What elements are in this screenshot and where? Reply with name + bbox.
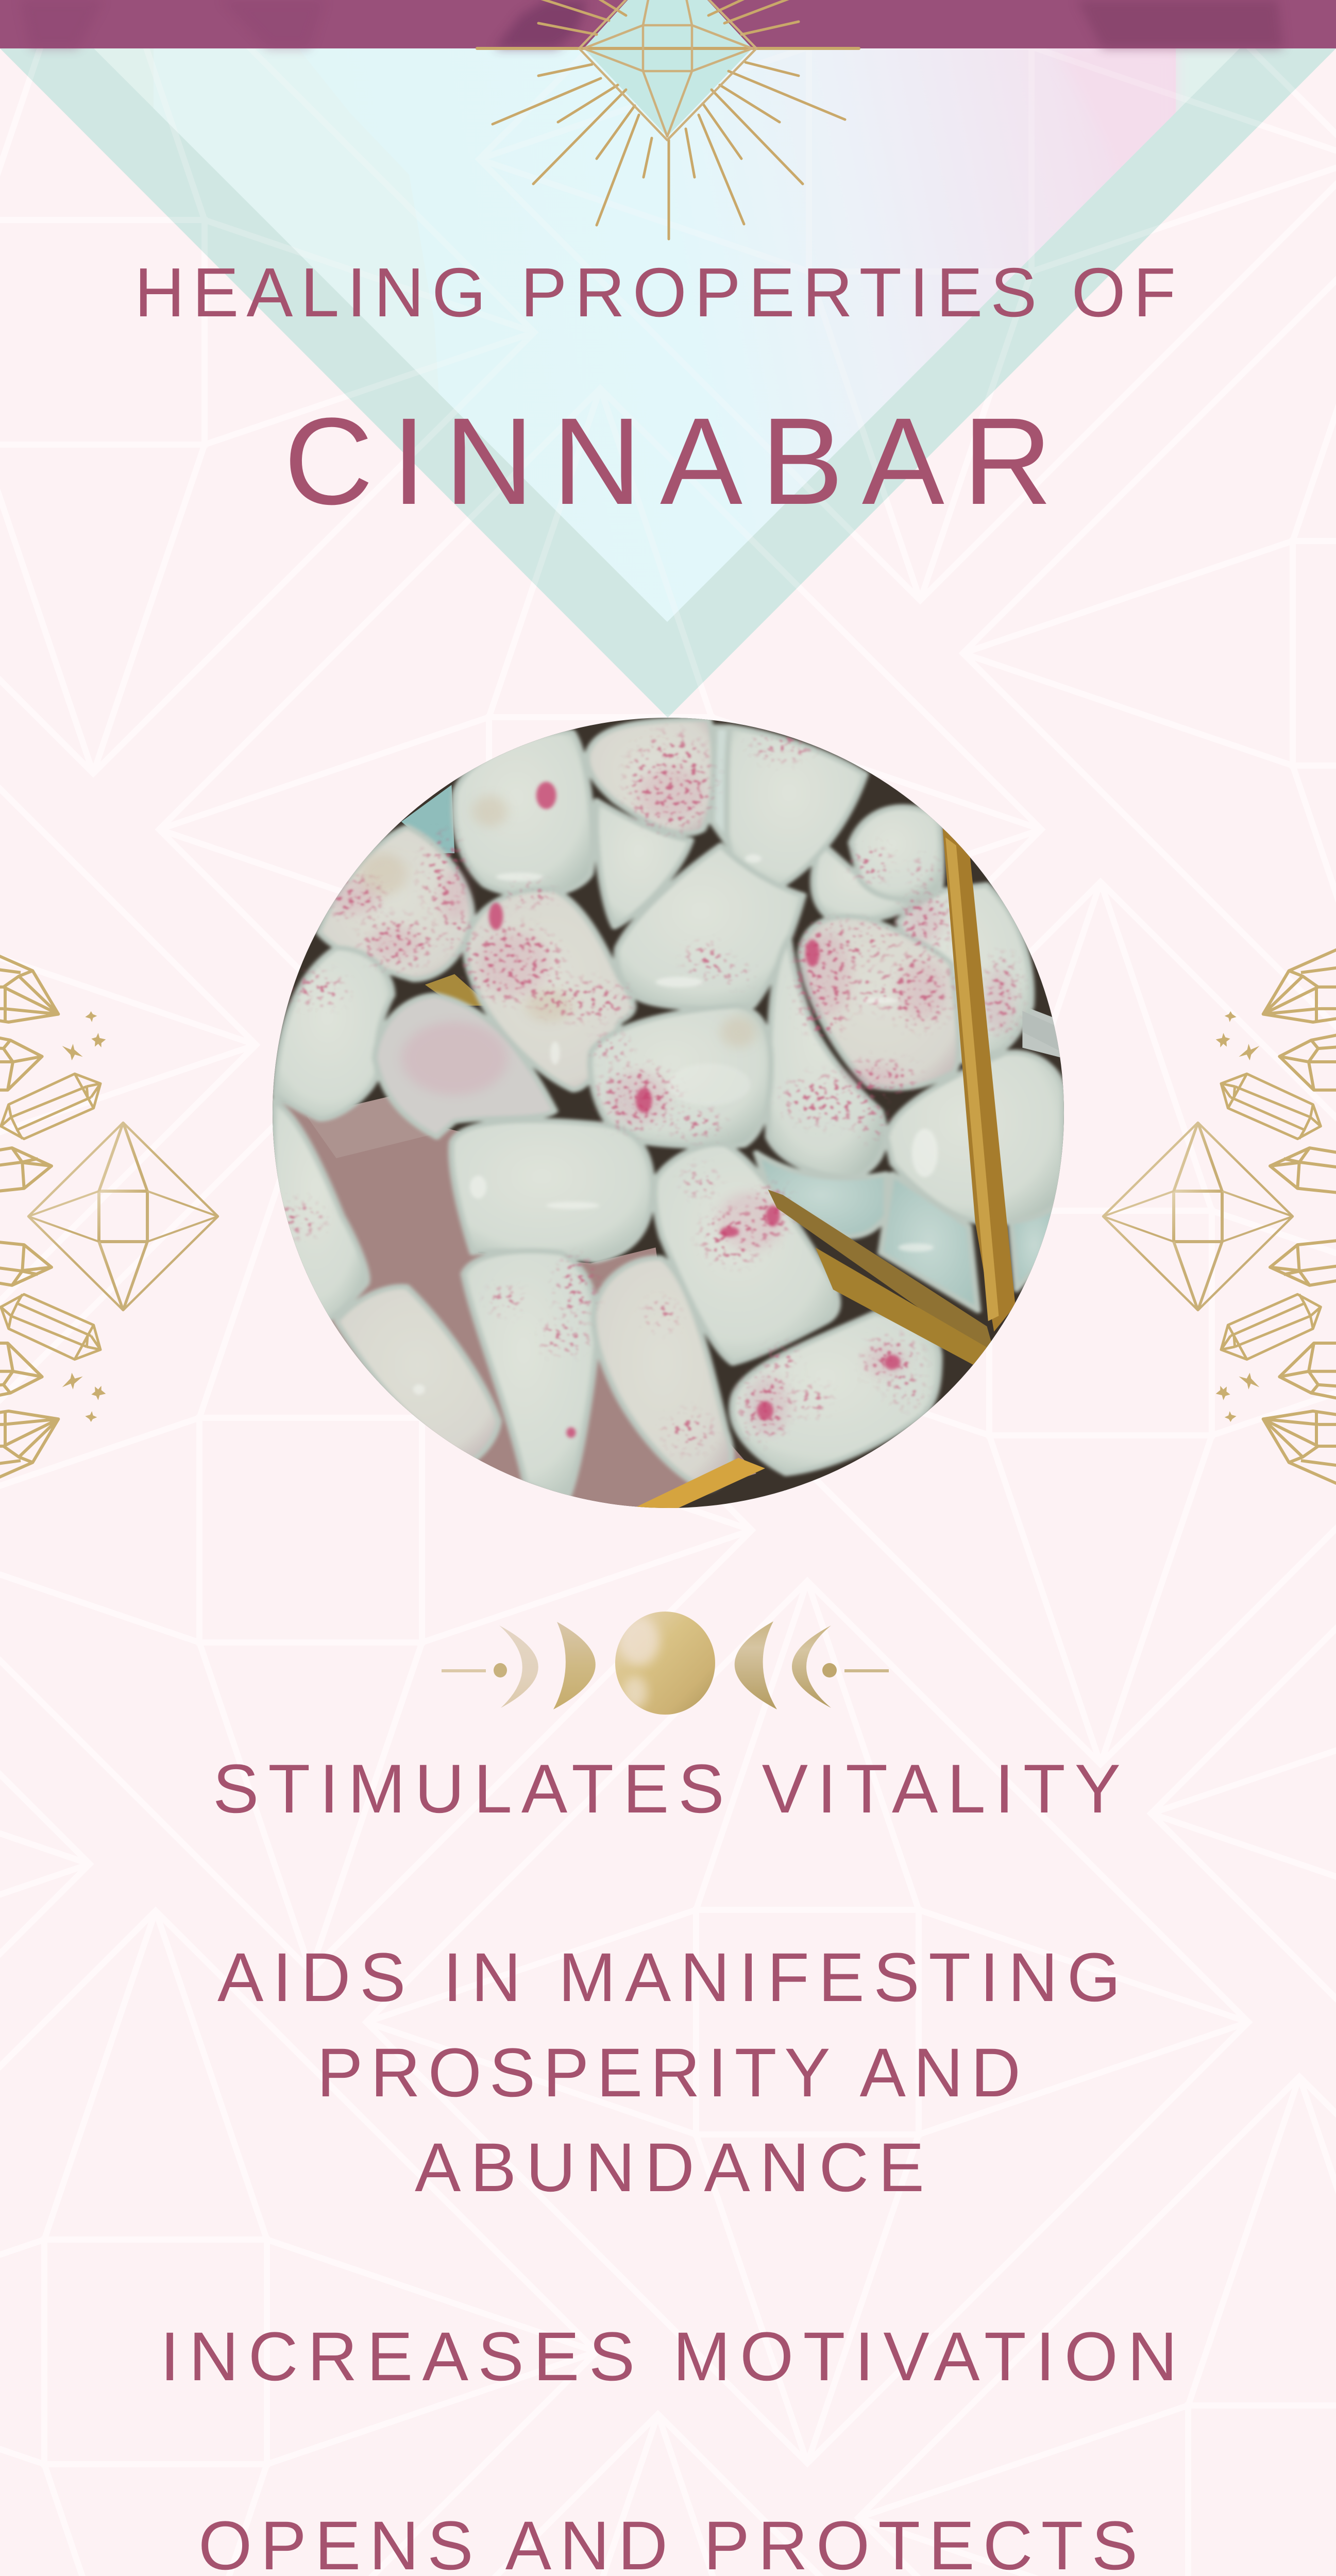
heading: healing properties of: HEALING PROPERTIES OF — [134, 253, 1176, 331]
heading: cinnabar: CINNABAR — [284, 392, 1052, 530]
text: aids in manifesting prosperity and abundance: ABUNDANCE — [415, 2129, 924, 2206]
text: stimulates vitality: STIMULATES VITALITY — [213, 1751, 1121, 1827]
page section: top with triangle, heading and photo — [0, 0, 1336, 1508]
icon: moon phases top — [442, 1612, 889, 1715]
pink haze under speckles — [330, 767, 1013, 1434]
pink cinnabar speckles — [265, 711, 1070, 1516]
panel: mint triangle — [0, 48, 1336, 718]
text: aids in manifesting prosperity and abundance — [217, 1939, 1121, 2206]
highlights — [413, 854, 938, 1395]
cloth — [271, 1100, 756, 1516]
photo: cinnabar tumbled stones in circle — [265, 711, 1070, 1516]
decoration: right gold crystals — [1103, 947, 1336, 1486]
text: aids in manifesting prosperity and abundance: PROSPERITY AND — [317, 2035, 1021, 2111]
icon: gold crystal with sun rays — [477, 0, 859, 239]
top bar — [0, 0, 1336, 48]
page section: middle with moon phases and text — [160, 1612, 1177, 2576]
text: increases motivation: INCREASES MOTIVATION — [160, 2318, 1177, 2395]
warm beige patches — [360, 795, 756, 1048]
mint glass and gold edges behind stones — [401, 785, 454, 853]
text: aids in manifesting prosperity and abundance: AIDS IN MANIFESTING — [217, 1939, 1121, 2016]
gold rays — [477, 0, 859, 239]
background crystal line pattern bottom — [0, 1911, 1336, 2576]
solid cinnabar blotches — [489, 782, 901, 1438]
decoration: left gold crystals — [0, 947, 218, 1486]
gold box frame — [768, 1190, 993, 1347]
background crystal line pattern middle — [0, 882, 1336, 2576]
crystal outline — [579, 0, 756, 140]
